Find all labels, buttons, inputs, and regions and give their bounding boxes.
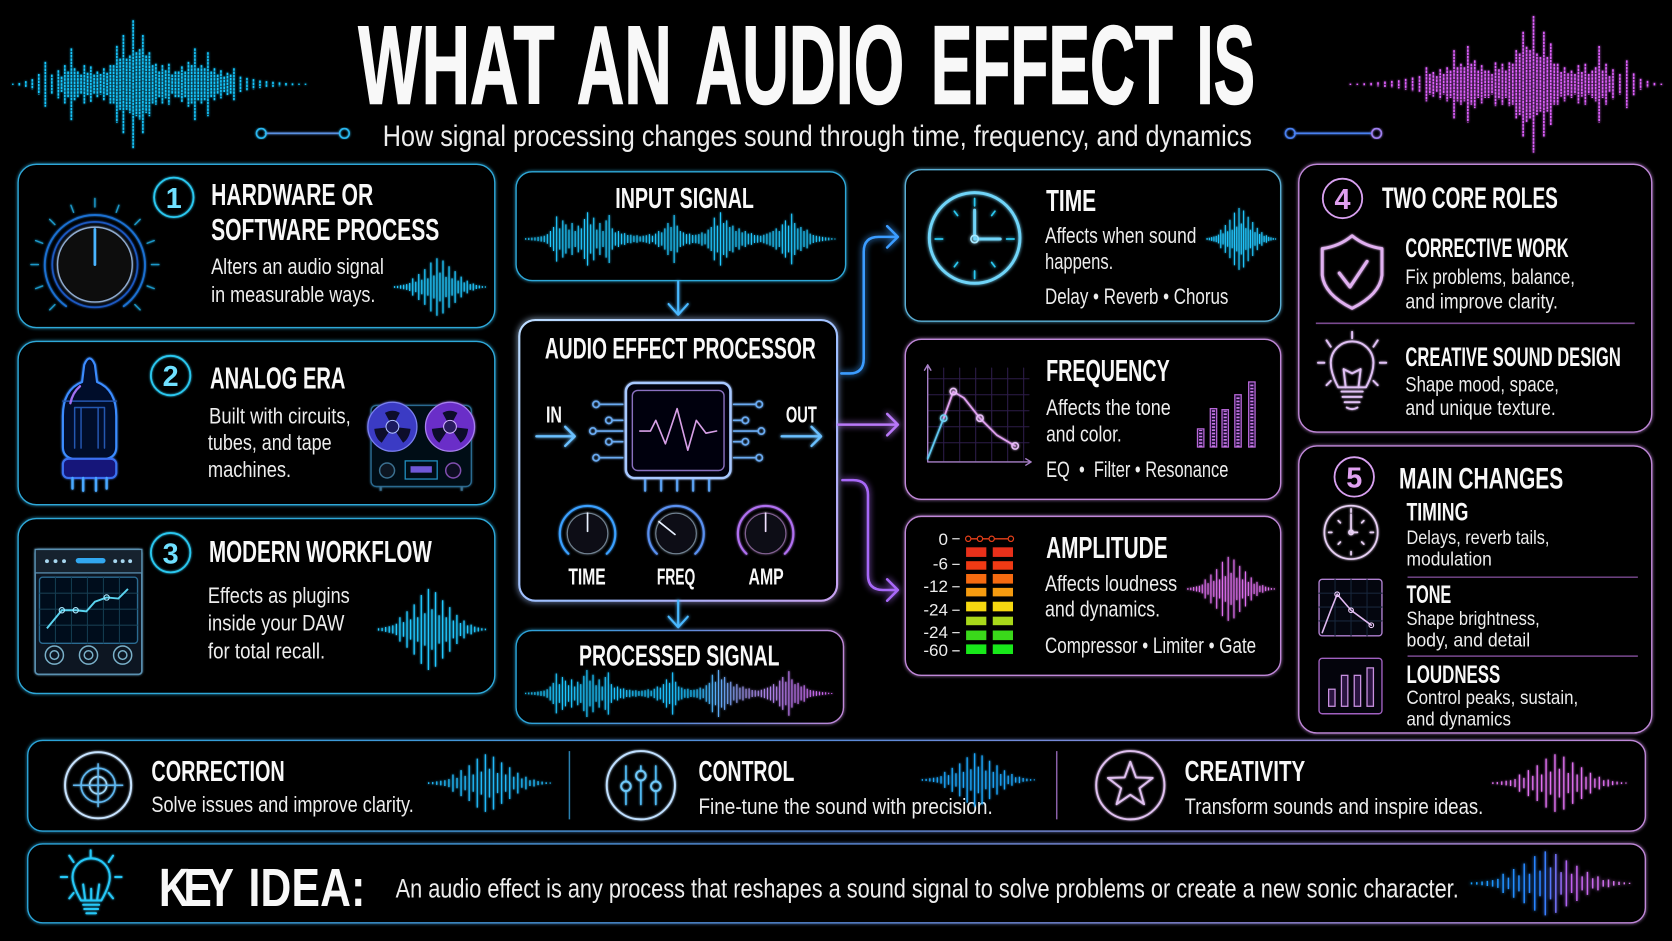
panel: main changes	[1299, 446, 1652, 733]
text block: and dynamics.	[1045, 597, 1160, 622]
panel: amplitude	[905, 516, 1281, 675]
chart: level meter	[923, 530, 1014, 660]
text block: An audio effect is any process that reshapes a sound signal to solve problems or create a new sonic character.	[396, 873, 1459, 903]
chart: level meter: -6	[933, 555, 948, 574]
waveform: header left	[13, 20, 306, 148]
label: in: IN	[546, 401, 562, 427]
arrow: to frequency	[838, 414, 898, 435]
item: tone: body, and detail	[1406, 630, 1530, 652]
icon: sliders	[607, 751, 675, 819]
title: IS	[1196, 3, 1255, 127]
item: control: Fine-tune the sound with precision.	[698, 794, 993, 819]
title: EFFECT	[931, 3, 1173, 127]
role: creative sound design	[1405, 342, 1621, 420]
role: creative sound design: and unique texture.	[1405, 396, 1556, 420]
badge: 2	[151, 356, 190, 395]
item: timing	[1406, 500, 1549, 570]
panel: input signal	[516, 172, 846, 281]
title: WHAT	[358, 3, 554, 127]
text block	[1045, 223, 1196, 274]
heading: TIME	[1046, 183, 1096, 218]
text block: and color.	[1046, 422, 1122, 447]
heading: ANALOG ERA	[210, 360, 345, 395]
badge: 3	[151, 533, 190, 572]
role: corrective work: CORRECTIVE WORK	[1405, 233, 1569, 263]
heading: HARDWARE OR	[211, 177, 373, 212]
icon: knob	[31, 198, 159, 310]
arrow: to time	[841, 226, 898, 373]
role: creative sound design: Shape mood, space,	[1405, 373, 1559, 397]
waveform	[526, 670, 832, 717]
panel: modern workflow	[18, 519, 495, 693]
badge: 2: 2	[163, 361, 179, 393]
chart: level meter: -24	[923, 623, 948, 642]
heading: PROCESSED SIGNAL	[579, 641, 779, 673]
item: correction: CORRECTION	[151, 756, 285, 788]
label: out: OUT	[786, 401, 817, 427]
heading	[211, 177, 439, 247]
text block: Effects as plugins	[208, 583, 350, 608]
arrow: processor to output	[669, 601, 688, 627]
chart: frequency curve	[925, 365, 1031, 465]
text block	[208, 404, 351, 482]
effect list: EQ • Filter • Resonance	[1046, 457, 1228, 482]
text block: Affects when sound	[1045, 223, 1196, 248]
waveform	[922, 753, 1034, 807]
panel: frequency	[905, 339, 1281, 499]
text block: in measurable ways.	[211, 282, 375, 307]
item: loudness	[1406, 662, 1578, 730]
text block: tubes, and tape	[208, 430, 332, 455]
heading: SOFTWARE PROCESS	[211, 212, 439, 247]
waveform	[1472, 851, 1630, 915]
connector: header left	[256, 129, 349, 138]
item: loudness: and dynamics	[1406, 708, 1511, 730]
chart: level meter: -12	[923, 577, 948, 596]
waveform	[379, 589, 485, 670]
knob: time	[560, 506, 615, 590]
waveform	[526, 212, 835, 266]
item: creativity: Transform sounds and inspire ideas.	[1185, 794, 1483, 819]
connector: header right	[1285, 129, 1381, 138]
knob: amp: AMP	[749, 564, 784, 590]
arrow: input to processor	[669, 282, 688, 315]
item: tone	[1406, 582, 1540, 652]
badge: 4	[1323, 179, 1362, 218]
icon: clock	[1324, 506, 1378, 559]
heading: FREQUENCY	[1046, 353, 1170, 388]
icon: clock	[929, 193, 1020, 283]
title: AUDIO	[695, 3, 904, 127]
icon: light bulb	[61, 850, 122, 913]
icon: light bulb	[1318, 332, 1386, 409]
icon: target	[65, 752, 131, 818]
text block	[211, 254, 384, 307]
icon: tone curve	[1319, 579, 1382, 636]
panel: two core roles	[1299, 164, 1652, 432]
panel: analog era	[18, 341, 495, 505]
item: timing: Delays, reverb tails,	[1406, 527, 1549, 549]
item: creativity: CREATIVITY	[1185, 756, 1305, 788]
badge: 5	[1335, 457, 1374, 497]
knob: time: TIME	[568, 564, 606, 590]
effect list: Compressor • Limiter • Gate	[1045, 633, 1256, 658]
icon: plugin window	[35, 549, 142, 674]
item: tone: Shape brightness,	[1406, 608, 1540, 630]
panel: correction control creativity	[28, 740, 1645, 831]
panel: audio effect processor	[519, 320, 837, 601]
panel: hardware or software process	[18, 164, 495, 328]
item: correction: Solve issues and improve clarity.	[151, 792, 414, 817]
text block	[1046, 395, 1171, 447]
heading	[159, 858, 365, 918]
title	[358, 3, 1255, 127]
waveform	[395, 258, 485, 316]
item: loudness: Control peaks, sustain,	[1406, 687, 1578, 709]
item: control: CONTROL	[698, 756, 794, 788]
panel: time	[905, 170, 1281, 321]
item: loudness: LOUDNESS	[1406, 662, 1500, 689]
knob: amp	[738, 506, 793, 590]
heading: IDEA:	[248, 858, 365, 918]
text block: happens.	[1045, 249, 1113, 274]
heading: MODERN WORKFLOW	[209, 534, 432, 569]
arrow: out	[782, 427, 821, 446]
heading: AUDIO EFFECT PROCESSOR	[545, 332, 816, 365]
badge: 1	[154, 178, 194, 217]
item: correction	[151, 756, 414, 817]
waveform	[1207, 208, 1276, 270]
icon: vacuum tube	[63, 358, 116, 491]
arrow: in	[536, 427, 575, 446]
badge: 5: 5	[1346, 463, 1362, 495]
icon: shield	[1322, 236, 1382, 308]
role: corrective work	[1405, 233, 1575, 313]
role: corrective work: and improve clarity.	[1405, 289, 1558, 313]
text block: inside your DAW	[208, 611, 345, 636]
waveform	[1493, 754, 1626, 812]
icon: tape machine	[368, 402, 475, 491]
heading: INPUT SIGNAL	[615, 183, 754, 215]
text block: Affects loudness	[1045, 571, 1177, 596]
title: AN	[577, 3, 672, 127]
arrow: to amplitude	[842, 480, 898, 601]
waveform	[429, 754, 550, 812]
heading: MAIN CHANGES	[1399, 463, 1563, 496]
icon: loudness bars	[1319, 658, 1382, 714]
panel: processed signal	[516, 631, 843, 723]
icon: processor chip	[590, 383, 765, 491]
text block: Affects the tone	[1046, 395, 1171, 420]
effect list: Delay • Reverb • Chorus	[1045, 284, 1228, 309]
heading: AMPLITUDE	[1046, 530, 1168, 565]
waveform	[1188, 557, 1274, 621]
badge: 3: 3	[163, 538, 179, 570]
chart: level bars	[1197, 382, 1255, 447]
text block: Alters an audio signal	[211, 254, 384, 279]
item: timing: TIMING	[1406, 500, 1468, 527]
subtitle: How signal processing changes sound through time, frequency, and dynamics	[383, 120, 1252, 153]
item: control	[698, 756, 993, 819]
knob: freq	[648, 506, 704, 590]
badge: 1: 1	[166, 183, 182, 215]
icon: star	[1096, 751, 1164, 819]
heading: TWO CORE ROLES	[1382, 182, 1558, 215]
text block	[1045, 571, 1177, 622]
item: creativity	[1185, 756, 1483, 819]
text block: for total recall.	[208, 638, 325, 663]
chart: level meter: 0	[938, 530, 948, 549]
text block	[208, 583, 350, 663]
waveform: header right	[1350, 16, 1661, 153]
item: timing: modulation	[1406, 548, 1492, 570]
text block: machines.	[208, 457, 291, 482]
panel: key idea	[28, 844, 1645, 923]
chart: level meter: -60	[923, 641, 948, 660]
heading: KEY	[159, 858, 234, 918]
chart: level meter: -24	[923, 601, 948, 620]
knob: freq: FREQ	[657, 564, 695, 590]
text block: Built with circuits,	[209, 404, 351, 429]
badge: 4: 4	[1334, 184, 1351, 216]
role: corrective work: Fix problems, balance,	[1405, 265, 1575, 289]
item: tone: TONE	[1406, 582, 1451, 609]
